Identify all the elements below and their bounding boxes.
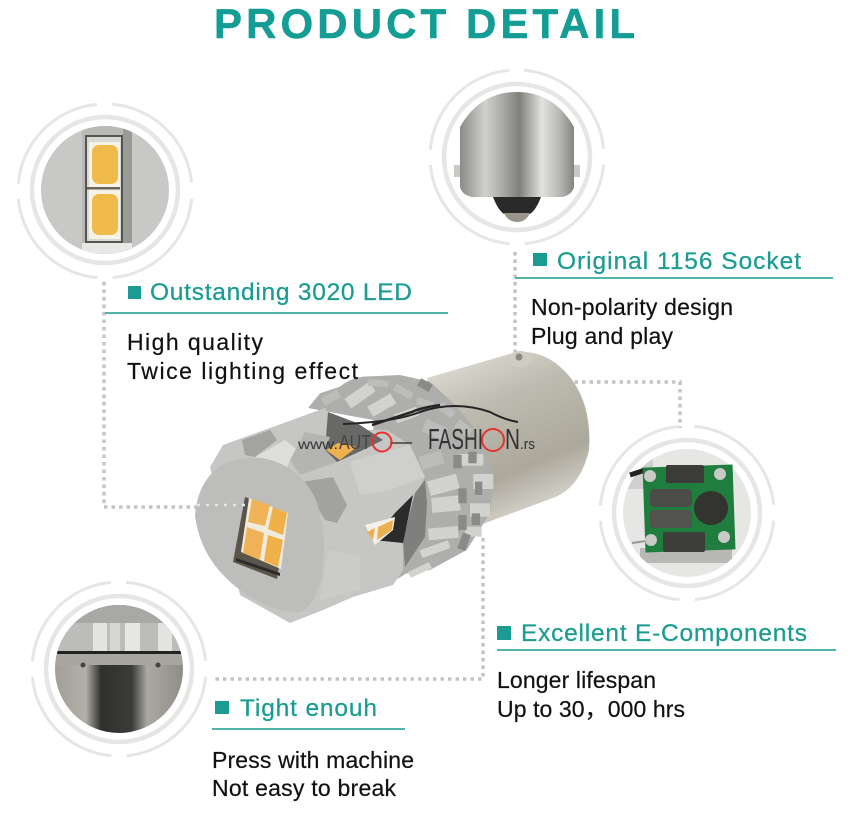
dark gap with top LED: [325, 412, 383, 462]
side LED chip: [365, 517, 395, 545]
dotted connector: components: [552, 382, 680, 428]
watermark brand AUTO: AUT: [339, 432, 371, 454]
watermark text: domain: .rs: [520, 436, 535, 453]
body facets: [242, 430, 425, 600]
rib ring: [308, 375, 493, 583]
watermark text: www.: [297, 436, 338, 452]
watermark car logo: [343, 405, 518, 452]
dotted connector: LED: [104, 282, 196, 507]
sliver between body and ring: [403, 480, 427, 567]
photo circle: socket closeup: [430, 70, 604, 244]
watermark text: fashion last letter: N: [505, 424, 520, 456]
title: PRODUCT DETAIL: [214, 0, 635, 47]
feature: Excellent E-Components: Up to 30，000 hrs: [497, 696, 685, 722]
feature: Excellent E-Components: [497, 620, 836, 722]
photo circle: press fit closeup: [32, 582, 206, 756]
front face: [195, 458, 324, 612]
feature: Tight enouh: Not easy to break: [212, 775, 396, 801]
feature: Excellent E-Components: Excellent E-Components: [521, 620, 807, 647]
feature: Outstanding 3020 LED: Twice lighting effect: [127, 358, 359, 384]
photo circle: circuit board: [600, 426, 774, 600]
feature: Original 1156 Socket: Original 1156 Socket: [557, 248, 801, 275]
feature: Original 1156 Socket: [515, 248, 833, 349]
feature: Outstanding 3020 LED: [105, 279, 448, 384]
feature: Outstanding 3020 LED: Outstanding 3020 LED: [150, 279, 412, 306]
main product: LED bulb: [195, 351, 589, 623]
watermark text: fashion: FASHI: [428, 424, 483, 456]
feature: Excellent E-Components: Longer lifespan: [497, 667, 656, 693]
feature: Tight enouh: Tight enouh: [240, 695, 377, 722]
dark gap with side LED: [373, 495, 413, 543]
front LED window: [233, 497, 288, 579]
dotted connector: socket: [513, 252, 517, 352]
socket pin: [508, 351, 532, 367]
bulb body: [210, 408, 425, 623]
feature: Original 1156 Socket: Non-polarity design: [531, 294, 733, 320]
feature: Original 1156 Socket: Plug and play: [531, 323, 674, 349]
feature: Tight enouh: [212, 695, 414, 801]
faint dotted line on face: [197, 504, 245, 506]
photo circle: LED closeup: [18, 104, 192, 278]
feature: Tight enouh: Press with machine: [212, 747, 414, 773]
dotted connector: tight: [214, 538, 483, 679]
bulb base cylinder: [427, 352, 589, 525]
feature: Outstanding 3020 LED: High quality: [127, 329, 264, 355]
